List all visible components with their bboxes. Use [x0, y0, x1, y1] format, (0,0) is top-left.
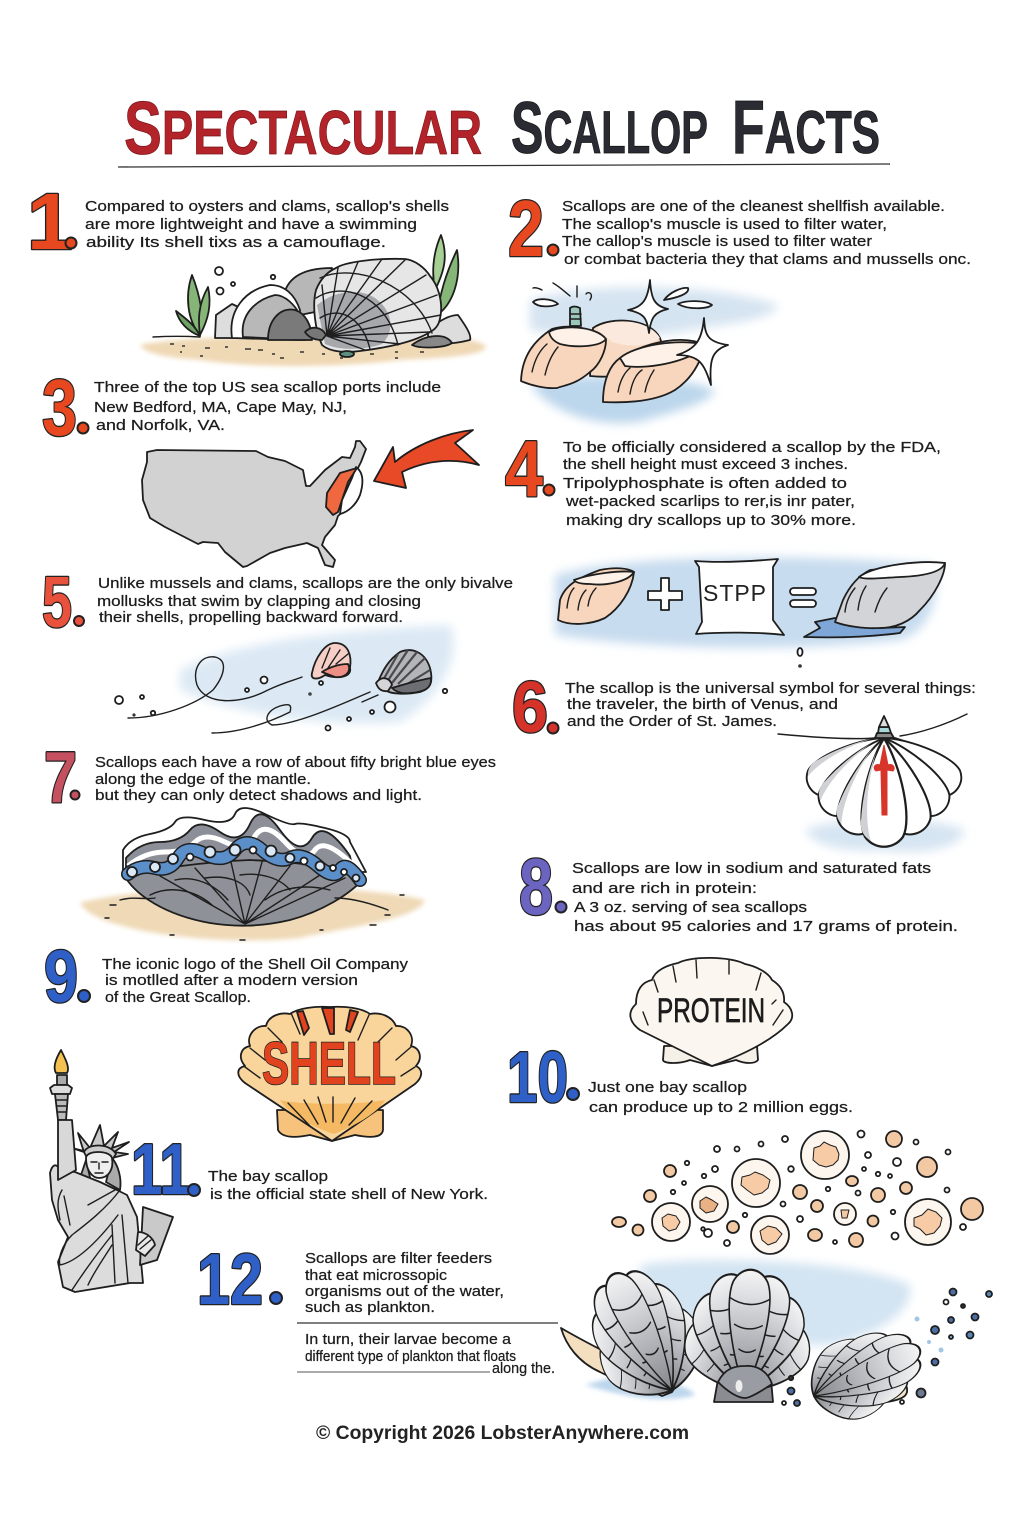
text: fact 2: The scallop's muscle is used to filter water,: [562, 216, 887, 233]
text: fact 12: such as plankton.: [305, 1299, 435, 1316]
text: fact 1: [85, 198, 449, 251]
text: fact 3: New Bedford, MA, Cape May, NJ,: [94, 399, 347, 416]
text: fact 12: Scallops are filter feeders: [305, 1250, 492, 1267]
text: fact 5: their shells, propelling backward forward.: [99, 609, 403, 626]
text: fact 12: along the.: [492, 1360, 555, 1377]
illustration: scallop plus STPP equals wet scallop: STPP: [703, 580, 766, 606]
text: fact 11: The bay scallop: [208, 1168, 328, 1185]
panel: fact 8: [519, 842, 958, 1066]
text: fact 9: The iconic logo of the Shell Oil Company: [102, 956, 409, 973]
number 11: 11: [131, 1130, 191, 1210]
illustration: swimming scallops: [115, 625, 454, 733]
text: fact 8: [572, 860, 958, 935]
illustration: camouflaged scallop among rocks: [140, 235, 486, 366]
title: FACTS: [732, 85, 880, 170]
text: fact 1: are more lightweight and have a swimming: [85, 216, 417, 233]
panel: fact 11: [50, 1050, 488, 1292]
text: fact 7: [95, 754, 496, 804]
copyright footer: © Copyright 2026 LobsterAnywhere.com: [316, 1423, 689, 1444]
text: fact 9: is motlled after a modern version: [105, 972, 358, 989]
text: fact 7: Scallops each have a row of about fifty bright blue eyes: [95, 754, 496, 771]
panel: fact 2: [508, 184, 971, 423]
text: fact 4: wet-packed scarlips to rer,is inr pater,: [565, 493, 855, 510]
arrow: pointing to east coast: [374, 430, 479, 488]
text: fact 4: Tripolyphosphate is often added to: [563, 475, 847, 492]
text: fact 2: or combat bacteria they that clams and mussells onc.: [564, 251, 971, 268]
text: fact 11: is the official state shell of New York.: [210, 1186, 488, 1203]
panel: fact 3: [42, 363, 479, 567]
panel: fact 7: [44, 738, 496, 940]
text: fact 8: and are rich in protein:: [572, 880, 757, 897]
title: SPECTACULAR: [124, 86, 482, 170]
text: fact 1: Compared to oysters and clams, scallop's shells: [85, 198, 449, 215]
illustration: pilgrim scallop with red cross: [778, 714, 968, 852]
illustration: Statue of Liberty: [50, 1050, 173, 1292]
number 6: 6: [512, 668, 548, 748]
gray swimming shell: [376, 650, 431, 694]
text: fact 5: [97, 575, 513, 626]
number 8: 8: [519, 842, 553, 931]
illustration: open scallop with blue eyes: [80, 808, 425, 940]
text: fact 11: [208, 1168, 488, 1203]
text: fact 9: of the Great Scallop.: [105, 989, 251, 1006]
text: fact 7: along the edge of the mantle.: [95, 771, 311, 788]
number 4: 4: [505, 424, 543, 513]
text: fact 12: In turn, their larvae become a: [305, 1331, 512, 1348]
number 2: 2: [508, 184, 544, 273]
text: fact 2: The callop's muscle is used to filter water: [562, 233, 872, 250]
text: fact 8: Scallops are low in sodium and saturated fats: [572, 860, 931, 877]
illustration: scallop plus STPP equals wet scallop: [555, 557, 945, 668]
big camouflaged shell: [305, 259, 441, 352]
blue mantle edge: [127, 843, 360, 882]
title: [118, 85, 890, 170]
panel: fact 12: [197, 1240, 992, 1444]
number 10: 10: [507, 1038, 568, 1118]
text: fact 8: has about 95 calories and 17 grams of protein.: [574, 918, 958, 935]
panel: fact 10: [507, 1038, 983, 1254]
number 1: 1: [27, 177, 73, 266]
number 5: 5: [42, 563, 72, 643]
number 7: 7: [44, 738, 77, 818]
text: fact 6: and the Order of St. James.: [567, 713, 777, 730]
text: fact 6: [565, 680, 976, 730]
text: fact 4: making dry scallops up to 30% more.: [566, 512, 856, 529]
text: fact 3: Three of the top US sea scallop ports include: [94, 379, 441, 396]
panel: fact 4: [505, 424, 945, 668]
text: fact 2: Scallops are one of the cleanest shellfish available.: [562, 198, 945, 215]
text: fact 4: [563, 439, 941, 529]
text: fact 5: mollusks that swim by clapping and closing: [97, 593, 421, 610]
illustration: Shell logo: [238, 1007, 421, 1141]
illustration: three scallop shells with plankton: [561, 1247, 992, 1444]
text: fact 12: organisms out of the water,: [305, 1283, 504, 1300]
illustration: protein shell: [630, 958, 792, 1066]
text: fact 4: To be officially considered a scallop by the FDA,: [563, 439, 941, 456]
number 12: 12: [197, 1240, 263, 1320]
text: fact 6: The scallop is the universal symbol for several things:: [565, 680, 976, 697]
text: fact 2: [562, 198, 971, 268]
illustration: scallop eggs: [612, 1130, 983, 1254]
text: fact 3: and Norfolk, VA.: [96, 417, 225, 434]
text: fact 1: ability Its shell tixs as a camouflage.: [86, 234, 386, 251]
panel: fact 5: [42, 563, 513, 733]
text: fact 10: [588, 1079, 853, 1116]
text: fact 9: [102, 956, 409, 1006]
illustration: Shell logo: SHELL: [262, 1030, 396, 1097]
text: fact 12: different type of plankton that floats: [305, 1348, 516, 1365]
text: fact 10: can produce up to 2 million eggs.: [589, 1099, 853, 1116]
number 9: 9: [44, 935, 78, 1018]
text: fact 5: Unlike mussels and clams, scallops are the only bivalve: [98, 575, 513, 592]
text: fact 10: Just one bay scallop: [588, 1079, 747, 1096]
text: fact 7: but they can only detect shadows and light.: [95, 787, 422, 804]
panel: fact 9: [44, 935, 421, 1141]
title: SCALLOP: [511, 88, 708, 169]
text: fact 4: the shell height must exceed 3 inches.: [563, 456, 848, 473]
illustration: protein shell: PROTEIN: [657, 992, 765, 1030]
text: fact 8: A 3 oz. serving of sea scallops: [574, 899, 807, 916]
panel: fact 6: [512, 668, 976, 852]
panel: fact 1: [27, 177, 486, 366]
text: fact 12: [297, 1250, 558, 1377]
map: United States with east coast highlight: [142, 441, 366, 567]
number 3: 3: [42, 363, 77, 452]
illustration: clean scallops with sparkles: [521, 280, 778, 423]
text: fact 6: the traveler, the birth of Venus, and: [567, 696, 838, 713]
text: fact 3: [94, 379, 441, 434]
text: fact 12: that eat microssopic: [305, 1267, 448, 1284]
